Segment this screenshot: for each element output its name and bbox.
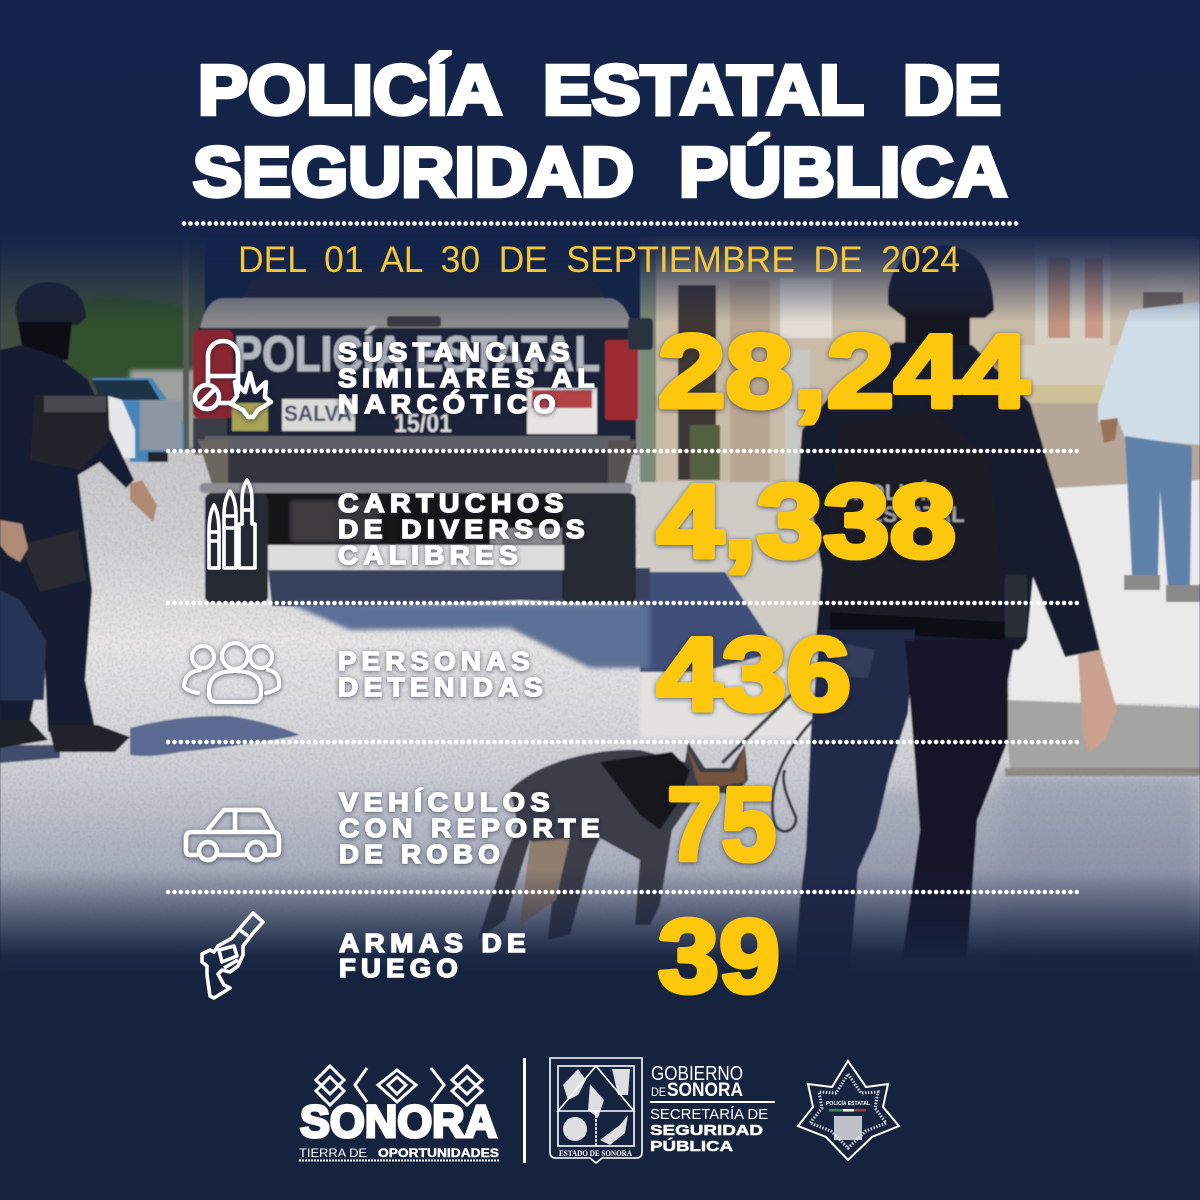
logo: gobierno text: SECRETARÍA DE [650,1106,768,1123]
logo: coat of arms [550,1058,642,1163]
truck: POLICÍA ESTATAL [234,326,600,382]
label: VEHÍCULOS [339,787,555,817]
label [338,646,548,702]
right officer [722,245,1117,970]
stat: personas [184,617,851,733]
icon: bullets [209,480,255,568]
label: PERSONAS [338,646,535,676]
building [640,236,1200,486]
label: ARMAS DE [339,928,531,958]
truck shadow [640,572,778,672]
truck: SALVA [284,401,352,426]
logo: gobierno text: PÚBLICA [650,1137,733,1155]
right leg [902,640,1015,960]
label [339,787,605,869]
title: SEGURIDAD [193,133,634,211]
tagline [299,1148,499,1160]
tagline: TIERRA DE [299,1148,367,1160]
logo: police star [798,1061,899,1160]
right officer: ESTATAL [868,502,965,527]
label: CALIBRES [338,540,523,570]
value: 39 [658,899,780,1015]
label [339,928,531,983]
right officer: POLICÍA [853,480,942,505]
label: FUEGO [339,953,463,983]
logo: gobierno text [650,1063,775,1155]
left officer [0,282,157,752]
wordmark: SONORA [300,1096,497,1147]
icon: people [184,643,279,702]
value: 436 [657,617,851,733]
logo: gobierno text: SONORA [667,1080,743,1101]
logo: Sonora [299,1066,499,1160]
label: SUSTANCIAS [338,337,575,367]
value: 75 [667,767,776,883]
logo: gobierno text: SEGURIDAD [650,1122,763,1139]
stat: armas [202,899,780,1015]
stat: sustancias [195,314,1029,430]
label: CON REPORTE [339,813,605,843]
label: DE DIVERSOS [338,514,590,544]
title [193,51,1007,211]
photo: police truck, officers and dog [0,236,1200,980]
value: 28,244 [658,314,1029,430]
dog [478,742,748,940]
parked cars [92,378,184,462]
vegetation and street background [0,236,205,441]
title: DE [903,51,1001,129]
icon: pill and leaf [195,341,271,417]
left leg [795,630,915,970]
label: CARTUCHOS [338,488,569,518]
logo: coat of arms: ESTADO DE SONORA [559,1149,632,1158]
icon: car [186,810,279,860]
logo: gobierno text: DE [651,1085,666,1099]
sidewalk [1010,480,1200,705]
truck: 15/01 [394,408,452,438]
label: DETENIDAS [338,672,548,702]
label: NARCÓTICO [338,389,561,419]
logo divider [523,1058,526,1163]
label: SIMILARES AL [338,363,600,393]
stat: vehiculos [186,767,776,883]
stat: cartuchos [209,464,956,580]
truck [193,268,653,603]
title: PÚBLICA [679,133,1007,211]
man in white shirt [1098,272,1200,602]
value: 4,338 [657,464,956,580]
label [338,488,590,570]
left officer shadow [130,716,300,756]
label: DE ROBO [339,839,505,869]
label [338,337,600,419]
date: DEL 01 AL 30 DE SEPTIEMBRE DE 2024 [238,239,960,280]
road [0,450,1200,980]
logo: police star: POLICÍA ESTATAL [826,1099,871,1107]
title: POLICÍA [198,51,502,129]
curb [1005,700,1200,772]
icon: revolver [202,913,263,998]
logo: gobierno text: GOBIERNO [651,1063,743,1085]
divider: below title [184,221,1017,226]
tagline: OPORTUNIDADES [378,1148,499,1160]
row dividers [168,451,1078,892]
icon: ornamental diamonds [316,1066,482,1105]
title: ESTATAL [543,51,864,129]
